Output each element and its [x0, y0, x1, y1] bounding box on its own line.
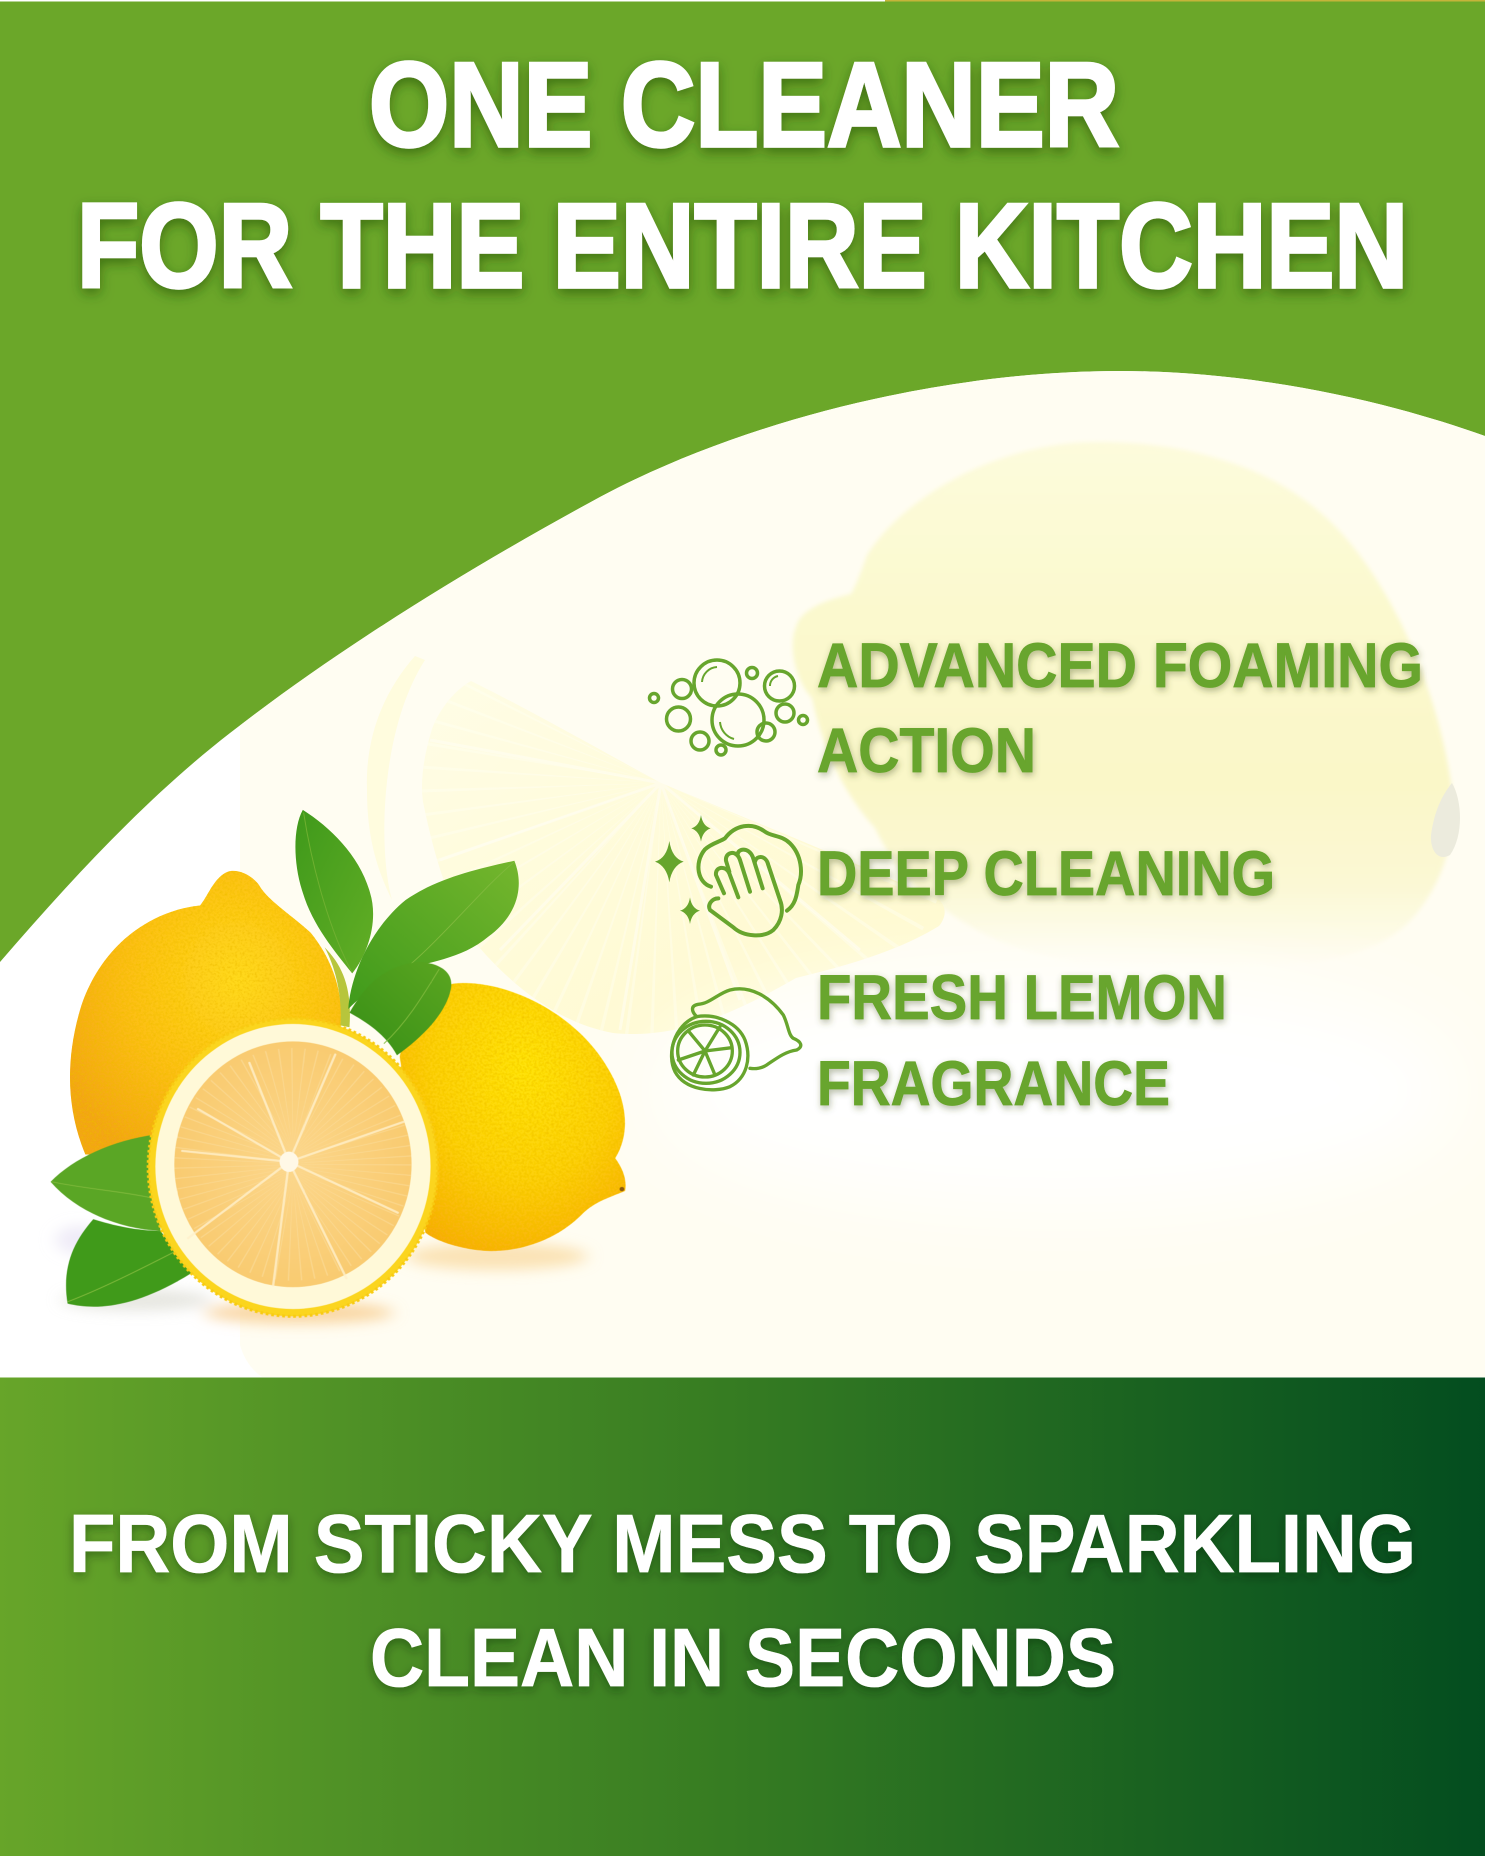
lower left lower leaf: [66, 1219, 192, 1307]
bottom tagline: CLEAN IN SECONDS: [370, 1611, 1116, 1704]
back right lemon: [400, 983, 626, 1251]
white curved panel: [0, 371, 1485, 1378]
icon: lemon with slice: [672, 989, 801, 1090]
text: advanced foaming action: ADVANCED FOAMING: [817, 631, 1423, 701]
text: advanced foaming action: ACTION: [817, 716, 1036, 786]
bottom gradient band: [0, 1378, 1485, 1856]
title: ONE CLEANER: [369, 38, 1119, 172]
title: [77, 38, 1408, 313]
green header background: [0, 0, 1485, 1400]
text: advanced foaming action: [817, 631, 1423, 786]
white foam under lemon: [660, 975, 1460, 1205]
feature list: [650, 631, 1423, 1119]
cream photo area: [240, 371, 1485, 1377]
lower left upper leaf: [51, 1135, 160, 1231]
top edge sliver: [0, 0, 1485, 2]
top right leaf: [348, 861, 519, 1009]
text: deep cleaning: DEEP CLEANING: [817, 839, 1275, 909]
text: fresh lemon fragrance: FRESH LEMON: [817, 963, 1227, 1033]
top vertical leaf: [295, 810, 373, 973]
faded lemon slice rind: [367, 656, 425, 900]
ground shadows: [56, 1225, 588, 1324]
faded lemon slice: [422, 681, 945, 1034]
faded lemon tip: [1431, 783, 1460, 857]
text: fresh lemon fragrance: FRAGRANCE: [817, 1049, 1170, 1119]
lemon tip: [620, 1187, 624, 1191]
front middle leaf: [349, 962, 451, 1055]
bottom tagline: [69, 1497, 1416, 1704]
faded large lemon: [793, 442, 1453, 968]
text: fresh lemon fragrance: [817, 963, 1227, 1119]
icon: foam bubbles: [650, 660, 808, 755]
back left lemon: [70, 871, 341, 1155]
lemon photo group: [51, 810, 626, 1324]
leaf stem sliver: [325, 947, 350, 1027]
faded lemon background photo: [240, 371, 1485, 1377]
cut lemon: [148, 1018, 438, 1316]
icon: hand wiping with sparkles: [655, 815, 801, 935]
